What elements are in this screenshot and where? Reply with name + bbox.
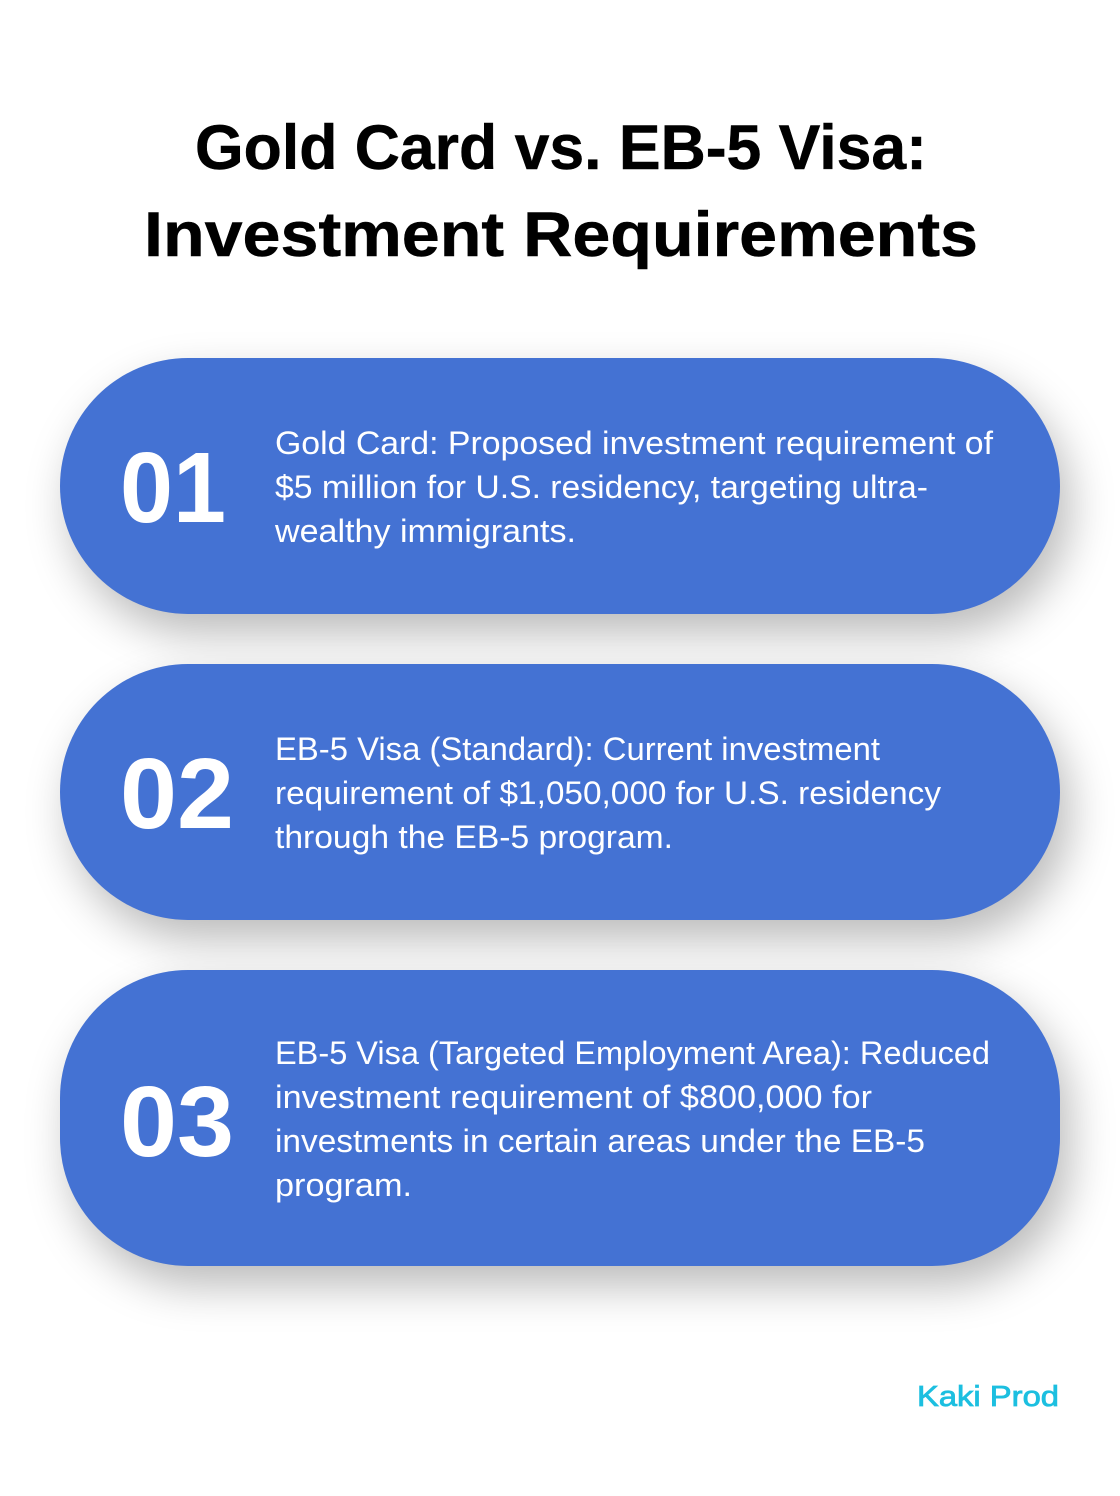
- title: [144, 113, 978, 270]
- text: EB-5 TEA description: investment requirement of $800,000 for: [275, 1079, 872, 1115]
- title: Gold Card vs. EB-5 Visa:: [195, 113, 927, 183]
- panel: EB-5 Standard: [60, 664, 1060, 920]
- text: EB-5 Standard description: through the EB-5 program.: [275, 819, 673, 855]
- number 02: 02: [120, 738, 234, 850]
- text: EB-5 TEA description: program.: [275, 1167, 412, 1203]
- text: EB-5 TEA description: investments in certain areas under the EB-5: [275, 1123, 925, 1159]
- panel: Gold Card: [60, 358, 1060, 614]
- number 03: 03: [120, 1066, 234, 1178]
- text: EB-5 TEA description: [275, 1035, 990, 1203]
- text: Gold Card description: $5 million for U.S. residency, targeting ultra-: [275, 469, 928, 505]
- text: EB-5 Standard description: [275, 731, 941, 855]
- number 01: 01: [120, 432, 226, 544]
- logo: Kaki Prod: Kaki Prod: [917, 1381, 1059, 1413]
- text: Gold Card description: wealthy immigrants.: [274, 513, 576, 549]
- text: EB-5 Standard description: requirement of $1,050,000 for U.S. residency: [275, 775, 941, 811]
- text: Gold Card description: Gold Card: Proposed investment requirement of: [275, 425, 993, 461]
- text: EB-5 TEA description: EB-5 Visa (Targeted Employment Area): Reduced: [275, 1035, 990, 1071]
- title: Investment Requirements: [144, 200, 978, 270]
- panel: EB-5 Targeted Employment Area: [60, 970, 1060, 1266]
- text: EB-5 Standard description: EB-5 Visa (Standard): Current investment: [275, 731, 880, 767]
- text: Gold Card description: [274, 425, 993, 549]
